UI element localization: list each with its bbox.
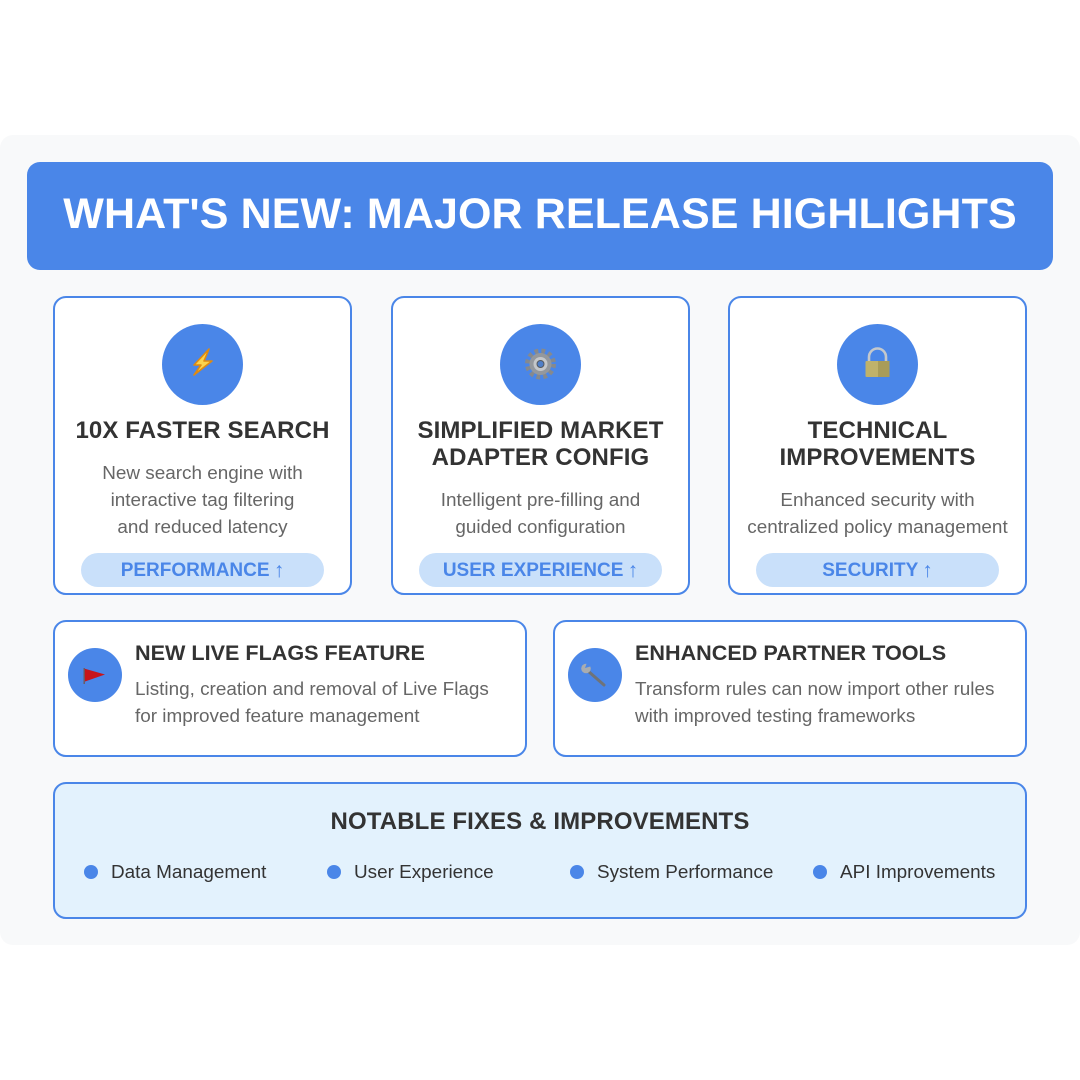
icon: padlock <box>837 324 918 405</box>
description <box>135 679 489 727</box>
icon: lightning bolt <box>162 324 243 405</box>
icon: red flag <box>68 648 122 702</box>
list item: system performance: System Performance <box>597 862 773 883</box>
heading: TECHNICAL <box>808 417 947 444</box>
list item: data management: Data Management <box>111 862 266 883</box>
title: WHAT'S NEW: MAJOR RELEASE HIGHLIGHTS <box>63 190 1017 238</box>
description: Enhanced security with <box>780 490 975 511</box>
description: Listing, creation and removal of Live Flags <box>135 679 489 700</box>
heading: ADAPTER CONFIG <box>432 444 649 471</box>
badge: security: SECURITY ↑ <box>822 559 933 582</box>
icon: wrench <box>568 648 622 702</box>
description <box>102 463 303 538</box>
list item: user experience: User Experience <box>354 862 494 883</box>
panel: enhanced partner tools <box>553 620 1027 757</box>
heading: ENHANCED PARTNER TOOLS <box>635 640 946 665</box>
panel: notable fixes and improvements <box>53 782 1027 919</box>
title banner <box>27 162 1053 270</box>
description: for improved feature management <box>135 706 420 727</box>
heading <box>779 417 976 471</box>
panel: 10x faster search <box>53 296 352 595</box>
heading: SIMPLIFIED MARKET <box>417 417 664 444</box>
description: centralized policy management <box>747 517 1008 538</box>
description: Intelligent pre-filling and <box>441 490 640 511</box>
icon: gear <box>500 324 581 405</box>
description: with improved testing frameworks <box>635 706 915 727</box>
panel: simplified market adapter config <box>391 296 690 595</box>
badge: security <box>756 553 999 587</box>
panel: technical improvements <box>728 296 1027 595</box>
badge: user experience: USER EXPERIENCE ↑ <box>443 559 638 582</box>
description: interactive tag filtering <box>111 490 294 511</box>
description: and reduced latency <box>117 517 288 538</box>
background panel <box>0 135 1080 945</box>
badge: performance <box>81 553 324 587</box>
badge: performance: PERFORMANCE ↑ <box>121 559 284 582</box>
heading: IMPROVEMENTS <box>779 444 976 471</box>
description: guided configuration <box>455 517 626 538</box>
description: New search engine with <box>102 463 303 484</box>
heading <box>417 417 664 471</box>
list item: api improvements: API Improvements <box>840 862 995 883</box>
panel: new live flags feature <box>53 620 527 757</box>
heading: NEW LIVE FLAGS FEATURE <box>135 640 425 665</box>
description: Transform rules can now import other rules <box>635 679 994 700</box>
description <box>441 490 640 538</box>
heading: 10X FASTER SEARCH <box>75 417 330 444</box>
description <box>747 490 1008 538</box>
badge: user experience <box>419 553 662 587</box>
heading: NOTABLE FIXES & IMPROVEMENTS <box>331 808 749 835</box>
description <box>635 679 994 727</box>
